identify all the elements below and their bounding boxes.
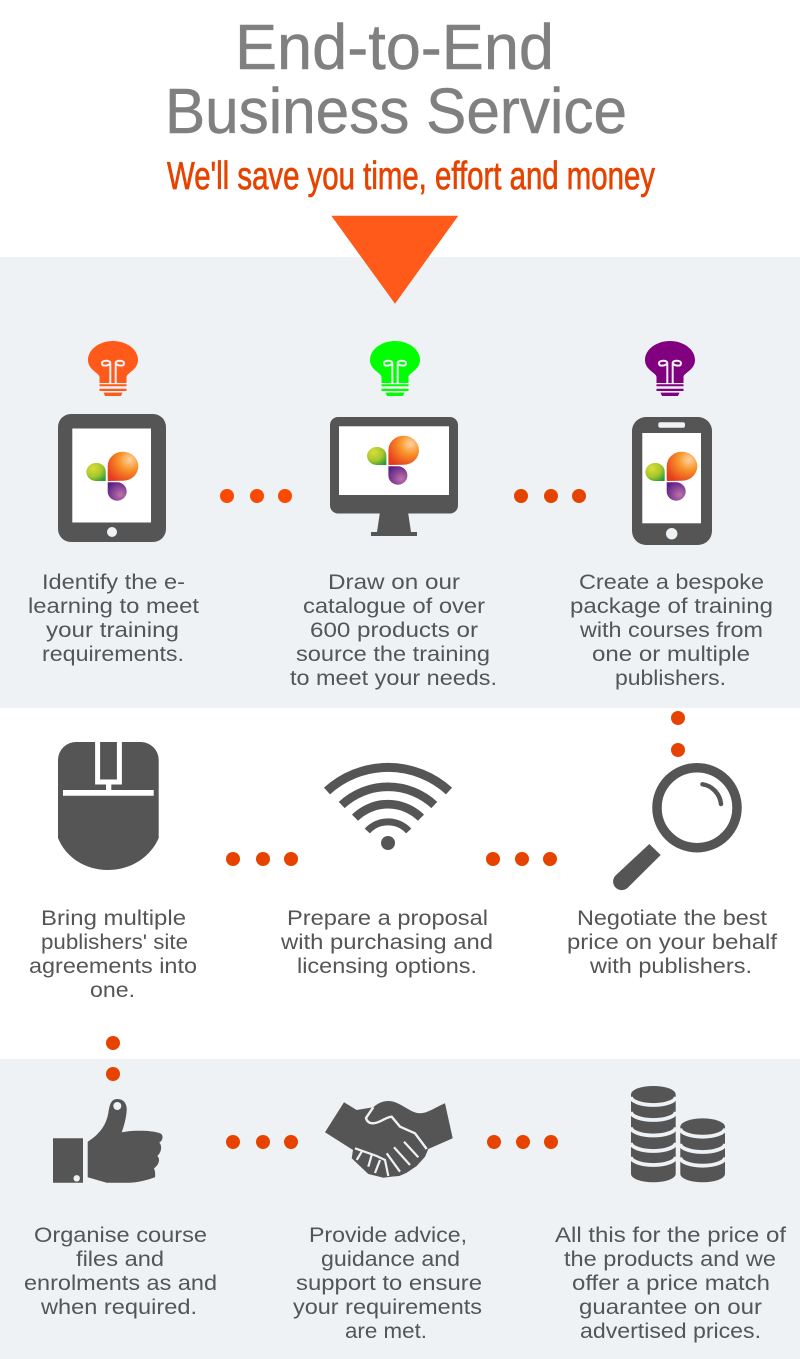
text: negotiate the best price: price on your behalf xyxy=(567,930,777,954)
text: negotiate the best price xyxy=(567,906,777,978)
text: provide advice and guidance xyxy=(293,1223,482,1343)
text: draw on our catalogue: source the training xyxy=(296,642,490,666)
arrow: down triangle xyxy=(331,216,458,304)
text: draw on our catalogue xyxy=(290,570,497,690)
text: create a bespoke package: with courses from xyxy=(579,618,763,642)
connector dots: wifi to mouse xyxy=(226,852,298,866)
text: identify the e-learning xyxy=(28,570,199,666)
title: Business Service xyxy=(165,75,627,147)
text: organise course files: enrolments as and xyxy=(24,1271,217,1295)
subtitle: We'll save you time, effort and money xyxy=(167,155,655,198)
text: prepare a proposal xyxy=(280,906,493,978)
text: draw on our catalogue: catalogue of over xyxy=(303,594,485,618)
connector dots: magnifier to wifi xyxy=(486,852,557,866)
text: identify the e-learning: requirements. xyxy=(42,642,184,666)
text: draw on our catalogue: to meet your needs. xyxy=(290,666,497,690)
text: organise course files: files and xyxy=(76,1247,164,1271)
icon: smartphone xyxy=(632,417,712,545)
text: organise course files: Organise course xyxy=(34,1223,207,1247)
text: price match guarantee: offer a price match xyxy=(572,1271,770,1295)
text: organise course files: when required. xyxy=(40,1295,197,1319)
text: price match guarantee xyxy=(555,1223,786,1343)
text: price match guarantee: All this for the price of xyxy=(555,1223,786,1247)
text: price match guarantee: the products and we xyxy=(564,1247,776,1271)
text: negotiate the best price: Negotiate the best xyxy=(577,906,767,930)
text: bring multiple publishers: publishers' site xyxy=(41,930,188,954)
text: price match guarantee: guarantee on our xyxy=(579,1295,762,1319)
text: bring multiple publishers: Bring multiple xyxy=(41,906,186,930)
text: identify the e-learning: Identify the e- xyxy=(42,570,185,594)
text: identify the e-learning: learning to meet xyxy=(28,594,199,618)
connector dots: handshake to coins xyxy=(487,1135,558,1149)
text: draw on our catalogue: Draw on our xyxy=(328,570,460,594)
icon: magnifying glass xyxy=(613,768,737,890)
text: provide advice and guidance: Provide advice, xyxy=(309,1223,467,1247)
text: organise course files xyxy=(24,1223,217,1319)
text: prepare a proposal: with purchasing and xyxy=(280,930,493,954)
text: provide advice and guidance: are met. xyxy=(345,1319,427,1343)
text: provide advice and guidance: support to ensure xyxy=(296,1271,482,1295)
title xyxy=(165,11,627,147)
connector dots: thumb to handshake xyxy=(226,1135,298,1149)
text: bring multiple publishers: one. xyxy=(90,978,135,1002)
connector dots: mouse down to thumb xyxy=(106,1036,120,1081)
text: price match guarantee: advertised prices. xyxy=(580,1319,761,1343)
icon: tablet xyxy=(58,414,166,542)
icon: green light bulb xyxy=(370,341,420,396)
text: create a bespoke package: Create a bespoke xyxy=(579,570,764,594)
icon: thumbs up xyxy=(53,1099,163,1183)
connector dots: monitor to phone xyxy=(514,489,586,503)
text: provide advice and guidance: your requirements xyxy=(293,1295,482,1319)
text: create a bespoke package: publishers. xyxy=(615,666,726,690)
icon: orange light bulb xyxy=(88,341,138,396)
text: create a bespoke package: package of training xyxy=(570,594,773,618)
panel: top band xyxy=(0,257,800,708)
icon: wifi signal xyxy=(327,767,449,850)
text: prepare a proposal: Prepare a proposal xyxy=(287,906,488,930)
text: bring multiple publishers: agreements into xyxy=(29,954,197,978)
icon: coin stacks xyxy=(631,1086,725,1182)
text: create a bespoke package: one or multiple xyxy=(592,642,750,666)
text: negotiate the best price: with publishers. xyxy=(589,954,752,978)
text: create a bespoke package xyxy=(570,570,773,690)
icon: purple light bulb xyxy=(645,341,695,396)
connector dots: tablet to monitor xyxy=(220,489,292,503)
icon: handshake xyxy=(325,1101,453,1178)
text: bring multiple publishers xyxy=(29,906,197,1002)
text: prepare a proposal: licensing options. xyxy=(297,954,477,978)
text: draw on our catalogue: 600 products or xyxy=(310,618,478,642)
connector dots: step 3 down to step 4 xyxy=(671,711,685,757)
icon: computer mouse xyxy=(58,742,159,870)
text: identify the e-learning: your training xyxy=(46,618,179,642)
text: provide advice and guidance: guidance and xyxy=(321,1247,460,1271)
title: End-to-End xyxy=(235,11,554,83)
icon: desktop monitor xyxy=(330,417,458,536)
panel: bottom band xyxy=(0,1059,800,1359)
